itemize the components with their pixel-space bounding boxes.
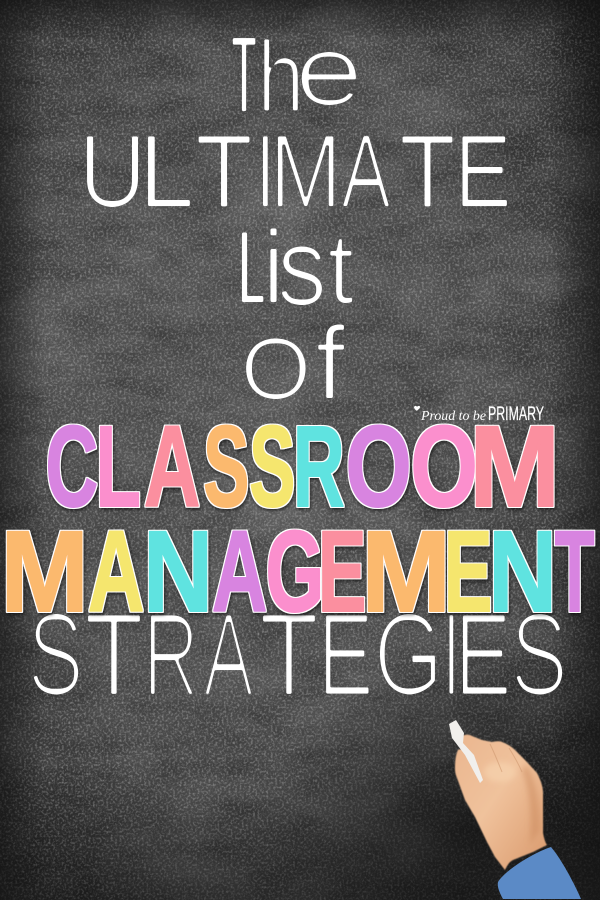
ULTIMATE: I (254, 114, 276, 230)
CLASSROOM: S (203, 403, 249, 531)
List: i (267, 210, 280, 326)
CLASSROOM: O (346, 403, 412, 531)
List (238, 206, 354, 329)
MANAGEMENT: A (88, 508, 144, 636)
ULTIMATE: A (341, 114, 391, 230)
CLASSROOM: R (293, 403, 345, 531)
MANAGEMENT: E (318, 508, 366, 636)
List: s (277, 206, 327, 329)
CLASSROOM: S (249, 403, 295, 531)
MANAGEMENT (1, 508, 594, 636)
Of: f (315, 306, 346, 422)
The: e (294, 15, 364, 127)
CLASSROOM: C (46, 403, 98, 531)
ULTIMATE: M (270, 114, 342, 230)
CLASSROOM: L (96, 403, 141, 531)
STRATEGIES: T (84, 589, 144, 721)
ULTIMATE: U (78, 114, 147, 230)
title: The Ultimate List Of (27, 14, 568, 721)
MANAGEMENT: M (1, 508, 89, 636)
The: h (257, 21, 305, 133)
STRATEGIES: S (27, 589, 84, 721)
STRATEGIES: E (317, 589, 374, 721)
MANAGEMENT: E (444, 508, 492, 636)
MANAGEMENT: M (362, 508, 451, 636)
ULTIMATE: T (195, 114, 253, 230)
STRATEGIES: G (374, 589, 444, 721)
CLASSROOM: A (144, 403, 200, 531)
CLASSROOM (46, 403, 560, 531)
watermark: Proud to be Primary: PRIMARY (488, 404, 544, 425)
STRATEGIES: T (259, 589, 319, 721)
The (232, 14, 364, 136)
ULTIMATE: E (454, 114, 512, 230)
Of (240, 306, 346, 422)
icon: hand holding chalk (449, 720, 581, 899)
CLASSROOM: O (410, 403, 478, 531)
ULTIMATE (78, 114, 512, 230)
STRATEGIES (27, 589, 568, 721)
List: L (238, 210, 264, 326)
ULTIMATE: L (138, 114, 195, 230)
The: T (232, 14, 256, 136)
MANAGEMENT: N (488, 508, 557, 636)
STRATEGIES: I (440, 589, 462, 721)
STRATEGIES: R (143, 589, 199, 721)
icon: heart (414, 406, 420, 411)
MANAGEMENT: G (266, 508, 324, 636)
MANAGEMENT: A (212, 508, 267, 636)
CLASSROOM: M (469, 403, 560, 531)
STRATEGIES: A (203, 589, 254, 721)
sleeve (498, 847, 581, 899)
ULTIMATE: T (399, 114, 456, 230)
watermark: Proud to be Primary: Proud to be (420, 409, 486, 424)
List: t (328, 213, 354, 325)
STRATEGIES: S (510, 589, 568, 721)
chalk (449, 720, 483, 783)
Of: O (240, 319, 311, 418)
watermark: Proud to be Primary (414, 404, 544, 425)
STRATEGIES: E (454, 589, 512, 721)
knuckle shading (484, 762, 540, 845)
MANAGEMENT: N (143, 508, 213, 636)
hand (455, 735, 547, 870)
heading: CLASSROOM MANAGEMENT colourful letters (1, 403, 594, 636)
